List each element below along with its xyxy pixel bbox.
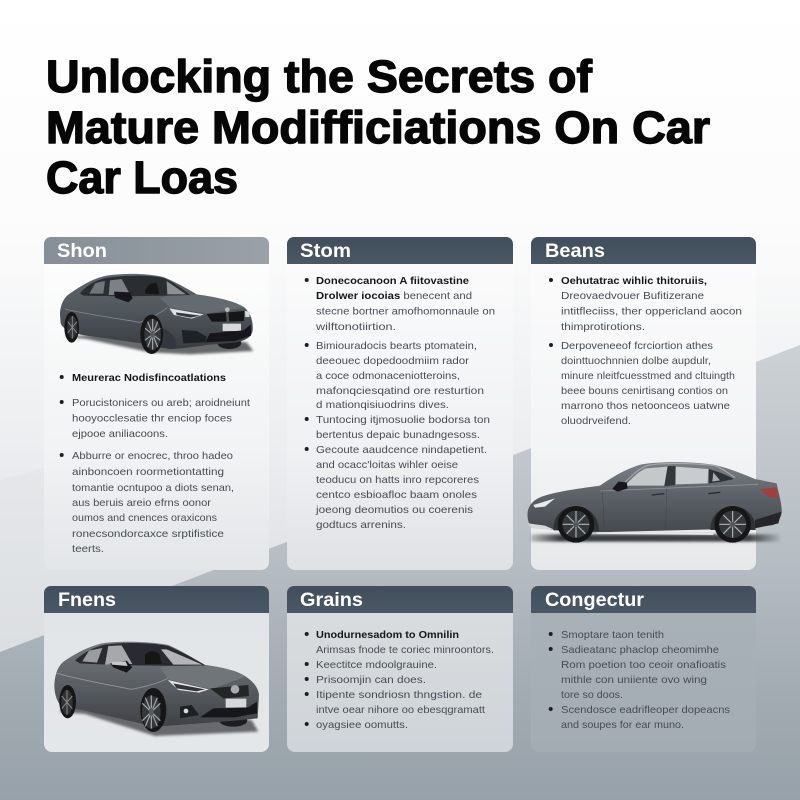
bullet: Oehutatrac: Oehutatrac wihlic thitoruiis, xyxy=(561,275,707,287)
bullet: Oehutatrac: thimprotirotions. xyxy=(561,321,645,333)
bullet: Sadieatanc xyxy=(549,644,726,701)
bullet: Keectitce: Keectitce mdoolgrauine. xyxy=(316,659,437,671)
title: Car Loas xyxy=(46,152,238,203)
bullet: Porucistonicers: hooyocclesatie thr enciop foces xyxy=(72,412,232,424)
bullet: Tuntocing: Tuntocing itjmosuolie bodorsa ton xyxy=(316,414,490,426)
bullet: Meurerac: Meurerac Nodisfincoatlations xyxy=(72,372,226,384)
panel: Stom xyxy=(287,237,513,570)
heading: Fnens xyxy=(44,586,269,613)
bullet: Gecoute: Gecoute aaudcence nindapetient. xyxy=(316,444,487,456)
bullet: Abburre: tomantie ocntupoo a diots senan, xyxy=(72,482,234,494)
heading: Stom xyxy=(287,237,513,264)
bullet: Derpoveneeof xyxy=(549,340,735,427)
bullet: Gecoute: teoducu on hatts inro repcoreres xyxy=(316,474,479,486)
icon: grey sedan front three-quarter xyxy=(54,642,259,736)
heading: Beans xyxy=(531,237,756,264)
bullet: Itipente xyxy=(305,689,485,716)
icon: grey sedan front three-quarter xyxy=(60,274,253,354)
bullet: Smoptare: Smoptare taon tenith xyxy=(561,629,664,641)
front wheel xyxy=(140,315,163,354)
bullet: Oehutatrac: Dreovaedvouer Bufitizerane xyxy=(561,290,704,302)
bullet: Abburre: ainboncoen roormetiontatting xyxy=(72,466,224,478)
bullet: Gecoute: and ocacc'loitas wihler oeise xyxy=(316,459,458,471)
panel: Grains xyxy=(287,586,513,752)
bullet: oyagsiee: oyagsiee oomutts. xyxy=(316,719,408,731)
bullet: Scendosce: and soupes for ear muno. xyxy=(561,719,684,731)
bullet: Tuntocing: bertentus depaic bunadngesoss. xyxy=(316,429,480,441)
heading: Shon xyxy=(44,237,269,264)
front wheel xyxy=(140,688,166,732)
panel: Fnens xyxy=(44,586,269,752)
title: Unlocking the Secrets of xyxy=(46,51,593,102)
bullet: Sadieatanc: Sadieatanc phaclop cheomimhe xyxy=(561,644,719,656)
heading: Fnens: Fnens xyxy=(58,590,116,611)
bullet: Abburre: aus beruis areio efrns oonor xyxy=(72,497,212,509)
bullet: Derpoveneeof: Derpoveneeof fcrciortion athes xyxy=(561,340,713,352)
heading: Congectur xyxy=(531,586,756,613)
bullet: Abburre xyxy=(60,450,234,555)
bullet: Bimiouradocis: a coce odmonaceniotteroins, xyxy=(316,370,460,382)
bullet: Unodurnesadom: Arimsas fnode te coriec minroontors. xyxy=(316,644,494,656)
bullet: Derpoveneeof: dointtuochnnien dolbe aupdulr, xyxy=(561,355,711,367)
bullet: Oehutatrac: intitfleciiss, ther oppericland aocon xyxy=(561,306,742,318)
bullet: Derpoveneeof: oluodrveifend. xyxy=(561,415,631,427)
icon: grey sedan side view xyxy=(527,462,782,543)
bullet: Scendosce xyxy=(549,704,730,731)
bullet: Itipente: Itipente sondriosn thngstion. de xyxy=(316,689,482,701)
bullet: Porucistonicers: Porucistonicers ou areb; aroidneiunt xyxy=(72,397,250,409)
bullet: Sadieatanc: tore so doos. xyxy=(561,689,623,701)
title xyxy=(46,51,710,203)
bullet: Bimiouradocis: d mationqisiuodrins dives. xyxy=(316,399,449,411)
bullet: Gecoute xyxy=(305,444,487,531)
bullet: Bimiouradocis: mafonqciesqatind ore resturtion xyxy=(316,385,484,397)
panel: Shon xyxy=(44,237,269,570)
bullet: Itipente: intve oear nihore oo ebesqgramatt xyxy=(316,704,485,716)
bullet: Abburre: oumos and cnences oraxicons xyxy=(72,512,217,524)
panel: Congectur xyxy=(531,586,756,752)
bullet: Derpoveneeof: beee bouns cenirtisang contios on xyxy=(561,385,728,397)
heading: Congectur: Congectur xyxy=(545,590,645,611)
front wheel xyxy=(553,506,599,543)
title: Mature Modifficiations On Car xyxy=(46,102,710,153)
bullet: Derpoveneeof: minure nleitfcuesstmed and cltuingth xyxy=(561,370,735,382)
bullet: Unodurnesadom xyxy=(305,629,494,656)
panel: Beans xyxy=(527,237,782,570)
bullet: Abburre: teerts. xyxy=(72,543,104,555)
rear wheel xyxy=(710,506,756,543)
heading: Grains: Grains xyxy=(300,590,363,611)
bullet: Bimiouradocis: Bimiouradocis bearts ptomatein, xyxy=(316,340,477,352)
heading: Stom: Stom xyxy=(300,241,351,262)
bullet: Abburre: Abburre or enocrec, throo hadeo xyxy=(72,450,233,462)
bullet: Gecoute: joeong deomutios ou coerenis xyxy=(315,504,473,516)
bullet: Abburre: ronecsondorcaxce srptifistice xyxy=(72,528,224,540)
bullet: Derpoveneeof: marrono thos netoonceos uatwne xyxy=(561,400,730,412)
heading: Grains xyxy=(287,586,513,613)
bullet: Unodurnesadom: Unodurnesadom to Omnilin xyxy=(316,629,459,641)
heading: Beans: Beans xyxy=(545,241,605,262)
bullet: Gecoute: godtucs arrenins. xyxy=(316,519,406,531)
bullet: Scendosce: Scendosce eadrifleoper dopeacns xyxy=(561,704,730,716)
bullet: Bimiouradocis xyxy=(305,340,484,411)
bullet: Tuntocing xyxy=(305,414,490,441)
bullet: Sadieatanc: mithle con uniiente ovo wing xyxy=(561,674,707,686)
bullet: Sadieatanc: Rom poetion too ceoir onafioatis xyxy=(561,659,726,671)
rear wheel xyxy=(64,312,79,343)
bullet: Donecocanoon: Drolwer iocoias benecent and xyxy=(316,290,472,302)
bullet: Porucistonicers: ejpooe aniliacoons. xyxy=(72,428,168,440)
bullet: Donecocanoon: stecne bortner amofhomonnaule on xyxy=(316,306,495,318)
bullet: Prisoomjin: Prisoomjin can does. xyxy=(316,674,426,686)
heading: Shon: Shon xyxy=(57,241,107,262)
bullet: Donecocanoon: Donecocanoon A fiitovastine xyxy=(316,275,469,287)
bullet: Gecoute: centco esbioafloc baam onoles xyxy=(316,489,477,501)
bullet: Oehutatrac xyxy=(549,275,742,333)
bullet: Bimiouradocis: deeouec dopedoodmiim rador xyxy=(316,355,470,367)
bullet: Donecocanoon xyxy=(305,275,495,333)
bullet: Donecocanoon: wilftonotiirtion. xyxy=(315,321,396,333)
rear wheel xyxy=(59,685,76,718)
bullet: Porucistonicers xyxy=(60,397,250,440)
